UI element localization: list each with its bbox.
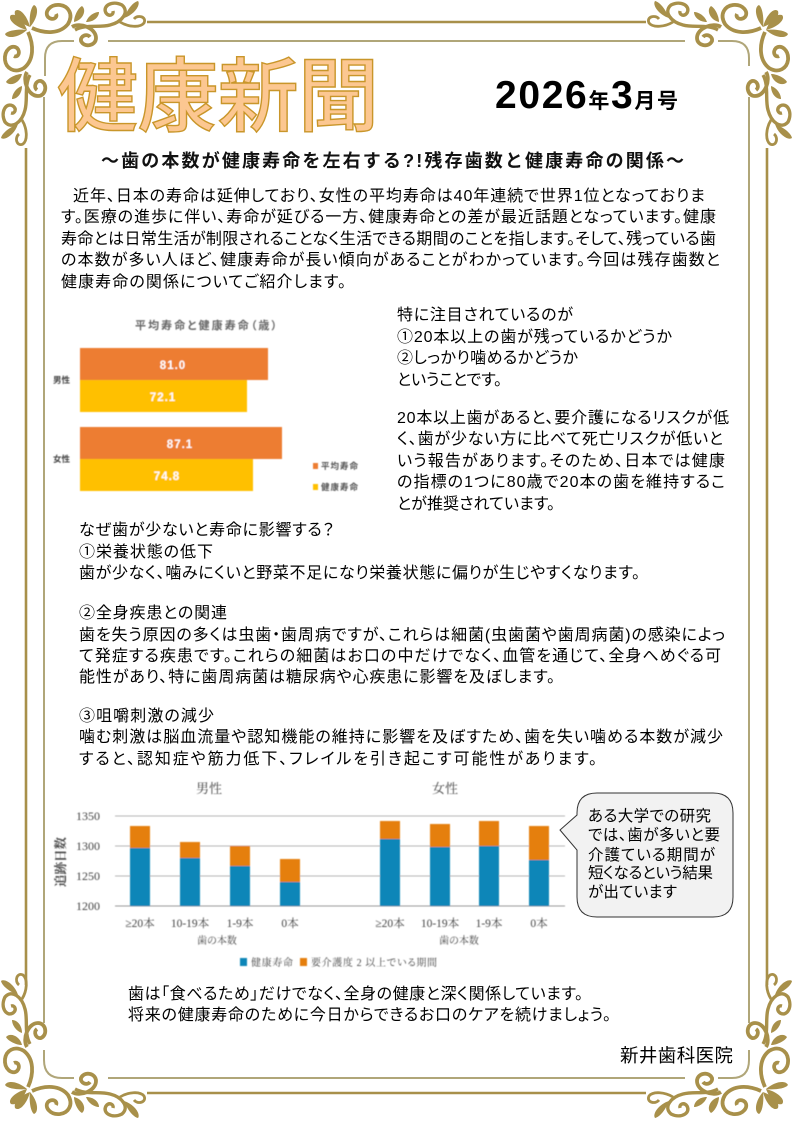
male bars: 72.1 [150, 392, 176, 404]
reasons text: 噛む刺激は脳血流量や認知機能の維持に影響を及ぼすため、歯を失い噛める本数が減少 [79, 728, 723, 746]
female group: 歯の本数 [439, 934, 479, 947]
callout: university study: ある大学での研究 [588, 807, 711, 825]
male group: 歯の本数 [197, 934, 237, 947]
closing message: 将来の健康寿命のために今日からできるお口のケアを続けましょう。 [128, 1006, 611, 1024]
intro paragraph: 寿命とは日常生活が制限されることなく生活できる期間のことを指します。そして、残っている歯 [61, 230, 716, 248]
right column text: く、歯が少ない方に比べて死亡リスクが低いと [397, 430, 723, 448]
gridlines and axis labels: 追跡日数 [53, 837, 68, 887]
reasons text: 歯を失う原因の多くは虫歯・歯周病ですが、これらは細菌(虫歯菌や歯周病菌)の感染によっ [79, 626, 725, 644]
chart title: 平均寿命と健康寿命（歳） [135, 318, 277, 332]
right column text: の指標の1つに80歳で20本の歯を維持するこ [397, 473, 725, 491]
female group: 0本 [530, 916, 548, 930]
intro paragraph: の本数が多い人ほど、健康寿命が長い傾向があることがわかっています。今回は残存歯数と [61, 251, 720, 269]
callout: university study: では、歯が多いと要 [588, 826, 720, 844]
masthead title: 健康新聞 [57, 53, 379, 143]
female bars: 87.1 [167, 439, 193, 451]
male group: 10-19本 [171, 916, 210, 930]
right column text: いう報告があります。そのため、日本では健康 [397, 452, 725, 470]
reasons text: すると、認知症や筋力低下、フレイルを引き起こす可能性があります。 [79, 750, 597, 768]
right column text: 特に注目されているのが [397, 306, 573, 324]
male group: 0本 [281, 916, 299, 930]
male bars [53, 348, 268, 412]
intro paragraph: 近年、日本の寿命は延伸しており、女性の平均寿命は40年連続で世界1位となっておりま [73, 187, 705, 205]
right column text: ①20本以上の歯が残っているかどうか [397, 328, 672, 346]
female group: 女性 [432, 781, 458, 796]
right column text: ということです。 [397, 371, 502, 389]
reasons text: て発症する疾患です。これらの細菌はお口の中だけでなく、血管を通じて、全身へめぐる可 [79, 647, 721, 665]
callout: university study: 介護ている期間が [588, 846, 716, 864]
male bars: 男性 [53, 375, 71, 385]
reasons text [79, 521, 725, 768]
gridlines and axis labels: 1250 [76, 869, 100, 883]
female bars [53, 427, 282, 491]
stacked bar chart: follow-up days by number of teeth [53, 781, 565, 969]
reasons text: ③咀嚼刺激の減少 [79, 707, 214, 725]
gridlines and axis labels: 1200 [76, 899, 100, 913]
female group: ≥20本 [375, 916, 405, 930]
callout: university study: が出ています [588, 883, 677, 901]
right column text: ②しっかり噛めるかどうか [397, 349, 578, 367]
intro paragraph: 健康寿命の関係についてご紹介します。 [61, 273, 346, 291]
female group: 1-9本 [476, 916, 503, 930]
callout: university study: 短くなるという結果 [588, 864, 713, 882]
reasons text: ②全身疾患との関連 [79, 604, 227, 622]
gridlines and axis labels [53, 809, 565, 913]
right column text: とが推奨されています。 [397, 495, 555, 513]
intro paragraph [61, 187, 720, 291]
bar chart: average and healthy life expectancy [53, 318, 358, 492]
reasons text: 能性があり、特に歯周病菌は糖尿病や心疾患に影響を及ぼします。 [79, 668, 555, 686]
male group: 1-9本 [227, 916, 254, 930]
chart legend: 健康寿命 [321, 482, 358, 492]
reasons text: 歯が少なく、噛みにくいと野菜不足になり栄養状態に偏りが生じやすくなります。 [79, 564, 640, 582]
reasons text: なぜ歯が少ないと寿命に影響する？ [79, 521, 334, 539]
right column text [397, 306, 729, 513]
male group [125, 781, 300, 947]
right column text: 20本以上歯があると、要介護になるリスクが低 [397, 409, 729, 427]
female bars: 女性 [53, 454, 71, 464]
intro paragraph: す。医療の進歩に伴い、寿命が延びる一方、健康寿命との差が最近話題となっています。健康 [61, 208, 716, 226]
chart legend [313, 461, 358, 492]
female group [375, 781, 549, 947]
subtitle heading: ～歯の本数が健康寿命を左右する?!残存歯数と健康寿命の関係～ [101, 150, 684, 171]
issue date: 2026年3月号 [495, 74, 678, 117]
male group: 男性 [196, 781, 222, 796]
gridlines and axis labels: 1300 [76, 839, 100, 853]
callout: university study [560, 793, 733, 917]
male bars: 81.0 [160, 360, 186, 372]
female bars: 74.8 [154, 471, 180, 483]
female group: 10-19本 [421, 916, 460, 930]
clinic name: 新井歯科医院 [620, 1045, 733, 1066]
gridlines and axis labels: 1350 [76, 809, 100, 823]
reasons text: ①栄養状態の低下 [79, 543, 213, 561]
chart legend: 健康寿命 [251, 956, 293, 969]
chart legend: 要介護度 2 以上でいる期間 [311, 956, 437, 969]
chart legend: 平均寿命 [321, 461, 358, 471]
closing message [128, 985, 611, 1024]
male group: ≥20本 [125, 916, 155, 930]
chart legend [240, 956, 437, 969]
closing message: 歯は「食べるため」だけでなく、全身の健康と深く関係しています。 [128, 985, 583, 1003]
